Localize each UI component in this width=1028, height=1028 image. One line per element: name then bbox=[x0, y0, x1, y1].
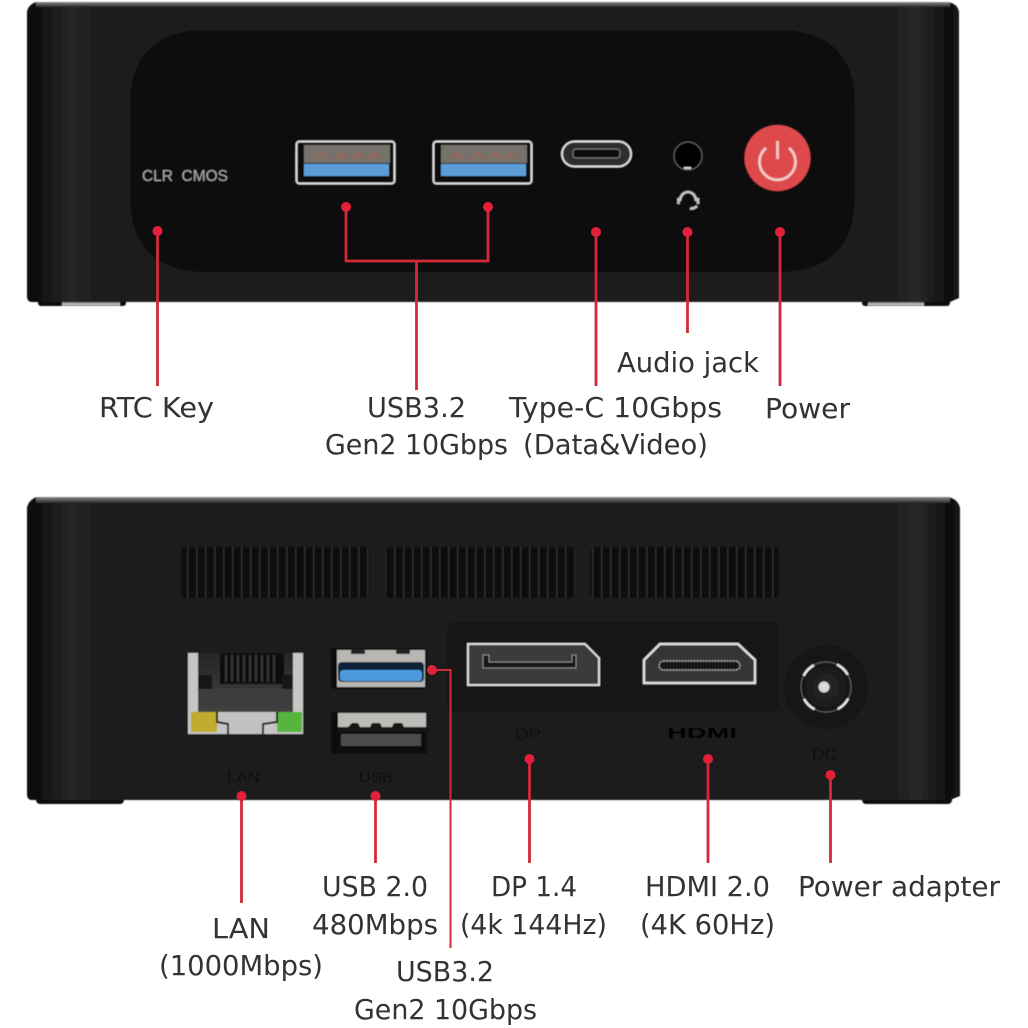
label: DP 1.4: DP 1.4 bbox=[491, 870, 577, 903]
label: DP 1.4: (4k 144Hz) bbox=[460, 908, 607, 941]
label: USB3.2 Gen2 rear: USB3.2 bbox=[396, 955, 494, 988]
LAN port bbox=[188, 653, 303, 734]
callout lines: front ports bbox=[152, 202, 785, 390]
USB 3.2 port 1 bbox=[296, 142, 394, 184]
callout: USB 2.0 line bbox=[370, 791, 380, 863]
label: Power: Power bbox=[765, 392, 850, 425]
label: Type-C bbox=[508, 391, 722, 461]
label: Audio jack: Audio jack bbox=[617, 346, 760, 379]
label: USB3.2 Gen2: USB3.2 bbox=[367, 391, 466, 424]
USB 3.2 rear port bbox=[331, 648, 427, 689]
icon: headphones bbox=[678, 192, 698, 209]
callout: RTC Key line bbox=[152, 226, 162, 386]
label: USB3.2 Gen2 rear: Gen2 10Gbps bbox=[354, 993, 537, 1026]
label: USB 2.0 bbox=[312, 870, 438, 941]
label: RTC Key: RTC Key bbox=[99, 391, 214, 424]
callout: Type-C line bbox=[591, 227, 601, 386]
label: LAN: (1000Mbps) bbox=[159, 949, 323, 982]
label: HDMI 2.0: (4K 60Hz) bbox=[640, 908, 775, 941]
silk labels: USB bbox=[359, 769, 393, 786]
label: USB3.2 Gen2: Gen2 10Gbps bbox=[325, 428, 508, 461]
front inset panel bbox=[130, 30, 855, 272]
callout: HDMI line bbox=[703, 754, 713, 863]
DP / HDMI recess bbox=[447, 622, 779, 712]
label: Type-C: (Data&Video) bbox=[523, 428, 708, 461]
silk labels: LAN bbox=[227, 769, 260, 786]
rear labels bbox=[159, 870, 1000, 1026]
silk labels bbox=[227, 725, 837, 786]
CLR CMOS silk text: CLR CMOS bbox=[142, 168, 228, 185]
front labels bbox=[99, 346, 850, 461]
label: HDMI 2.0: HDMI 2.0 bbox=[645, 870, 770, 903]
label: Type-C: Type-C 10Gbps bbox=[508, 391, 722, 424]
callout: USB bracket line bbox=[341, 202, 493, 390]
panel: front of mini PC bbox=[27, 2, 959, 306]
label: LAN bbox=[159, 912, 323, 982]
label: USB3.2 Gen2 bbox=[325, 391, 508, 461]
silk labels: DC bbox=[812, 746, 837, 763]
silk labels: DP bbox=[515, 726, 541, 743]
label: HDMI 2.0 bbox=[640, 870, 775, 941]
device body front bbox=[27, 2, 959, 302]
audio jack bbox=[674, 142, 702, 170]
device feet bbox=[38, 296, 950, 306]
callout lines: rear ports bbox=[236, 665, 836, 948]
label: USB3.2 Gen2 rear bbox=[354, 955, 537, 1026]
USB 2.0 rear port bbox=[331, 712, 430, 754]
callout: DP line bbox=[524, 754, 534, 863]
DC jack bbox=[784, 645, 868, 729]
callout: USB3.2 line bbox=[427, 665, 450, 948]
device body rear bbox=[27, 497, 960, 800]
callout: LAN line bbox=[236, 791, 246, 903]
silk labels: HDMI bbox=[667, 725, 737, 742]
panel: rear of mini PC bbox=[27, 497, 960, 804]
icon: power button bbox=[744, 125, 810, 191]
callout: audio line bbox=[682, 227, 692, 333]
label: USB 2.0: USB 2.0 bbox=[322, 870, 428, 903]
HDMI port bbox=[644, 644, 755, 683]
callout: DC line bbox=[826, 770, 836, 863]
Type-C port bbox=[562, 142, 631, 166]
label: Power adapter: Power adapter bbox=[798, 870, 1000, 903]
vents bbox=[181, 547, 779, 598]
device feet bbox=[36, 794, 952, 804]
USB 3.2 port 2 bbox=[434, 142, 532, 184]
label: LAN: LAN bbox=[212, 912, 270, 945]
callout: power line bbox=[775, 227, 785, 386]
DisplayPort port bbox=[468, 644, 599, 685]
label: DP 1.4 bbox=[460, 870, 607, 941]
label: USB 2.0: 480Mbps bbox=[312, 908, 438, 941]
